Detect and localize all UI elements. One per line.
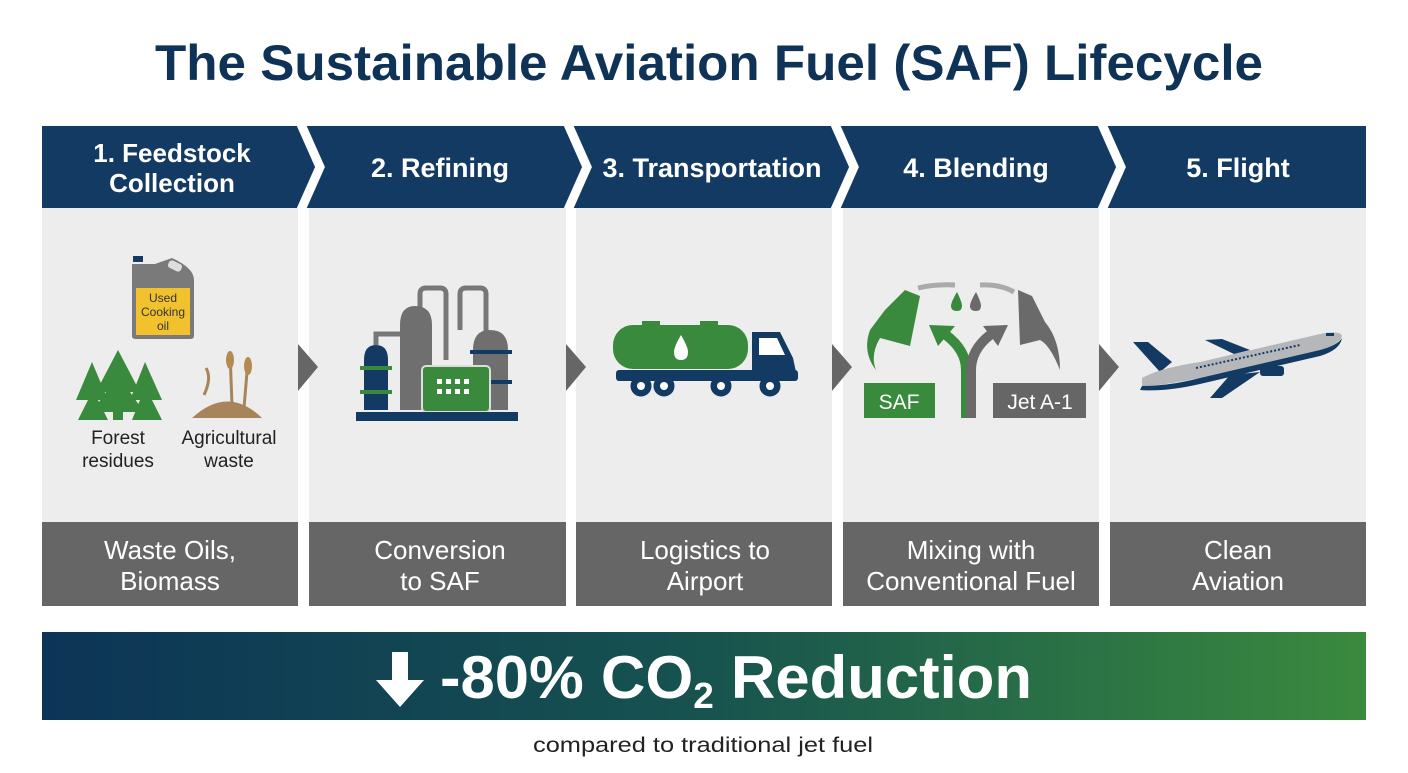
icon: used cooking oil jug: Used bbox=[149, 291, 177, 305]
icon: used cooking oil jug: oil bbox=[157, 319, 169, 333]
caption 4: Mixing with bbox=[907, 535, 1035, 565]
banner: CO2 reduction: 2 bbox=[693, 675, 714, 716]
icon: down arrow bbox=[376, 652, 424, 707]
header 3 text: 3. Transportation bbox=[602, 153, 822, 183]
icon: used cooking oil jug: Cooking bbox=[141, 305, 185, 319]
caption 5: Aviation bbox=[1192, 566, 1284, 596]
icon: forest trees bbox=[76, 350, 162, 420]
caption 5: Clean bbox=[1204, 535, 1272, 565]
caption 1: Biomass bbox=[120, 566, 220, 596]
caption 2: Conversion bbox=[374, 535, 506, 565]
caption 1: Waste Oils, bbox=[104, 535, 236, 565]
icon: airplane bbox=[1133, 332, 1342, 398]
text: agricultural waste: Agricultural bbox=[181, 428, 277, 449]
label: Jet A-1: Jet A-1 bbox=[1007, 391, 1073, 414]
text: forest residues: residues bbox=[82, 451, 154, 472]
icon: tanker truck bbox=[613, 321, 798, 396]
header 1 text: Collection bbox=[109, 168, 235, 198]
label: Jet A-1 bbox=[993, 383, 1086, 418]
banner: CO2 reduction: -80% CO bbox=[440, 644, 687, 711]
header 2 text: 2. Refining bbox=[371, 153, 509, 183]
label: SAF bbox=[864, 383, 935, 418]
header 1 text: 1. Feedstock bbox=[93, 138, 251, 168]
arrows between panels bbox=[298, 344, 1119, 391]
caption 4: Conventional Fuel bbox=[866, 566, 1076, 596]
icon: blending pumps and arrows bbox=[867, 285, 1060, 418]
caption 3: Logistics to bbox=[640, 535, 770, 565]
caption 2: to SAF bbox=[400, 566, 480, 596]
icon: used cooking oil jug bbox=[132, 256, 194, 339]
bottom caption boxes bbox=[42, 522, 1366, 606]
icon: refinery bbox=[356, 288, 518, 421]
banner: CO2 reduction: Reduction bbox=[714, 644, 1032, 711]
header 4 text: 4. Blending bbox=[903, 153, 1049, 183]
text: agricultural waste: waste bbox=[203, 451, 254, 472]
banner: CO2 reduction bbox=[42, 632, 1366, 720]
icon: agricultural waste bbox=[192, 351, 262, 418]
header 5 text: 5. Flight bbox=[1186, 153, 1290, 183]
text: forest residues: Forest bbox=[91, 428, 146, 449]
caption 3: Airport bbox=[667, 566, 744, 596]
label: SAF: SAF bbox=[879, 391, 919, 414]
panel bodies bbox=[42, 208, 1366, 522]
header row bbox=[42, 122, 1366, 212]
title: The Sustainable Aviation Fuel (SAF) Lifecycle bbox=[155, 35, 1263, 91]
subtitle: compared to traditional jet fuel bbox=[533, 734, 873, 757]
